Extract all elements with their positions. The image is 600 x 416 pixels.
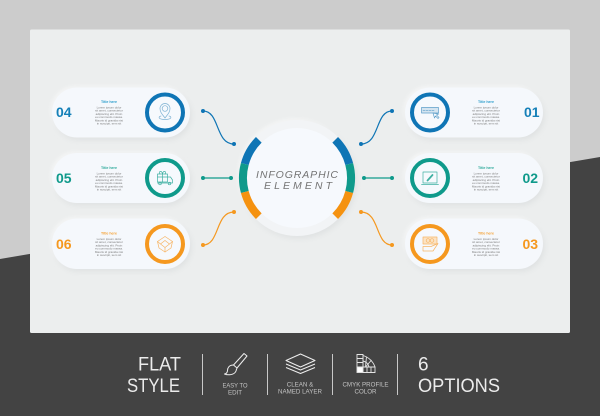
text block 05: sit amet, consectetur [95,175,123,179]
text block 06: in suscipit, sem sit [97,253,121,257]
center title: INFOGRAPHIC [256,169,338,181]
icon: laptop [422,172,438,184]
icon: cmyk swatch [357,354,375,372]
label: cmyk profile color: CMYK PROFILE [342,382,389,388]
icon ring 05 [147,160,183,196]
icon: brush [224,354,247,375]
icon: gem box [158,236,172,252]
label: easy to edit: EDIT [228,390,242,396]
text block 02: eu commodo massa. [472,181,500,185]
text block 04: adipiscing elit. Proin [96,112,123,116]
label: cmyk profile color [342,382,389,396]
text block 01: Title here [478,100,494,104]
number 05: 05 [56,170,72,186]
text block 06: Mauris id gravida nisi [95,250,123,254]
connector 01 [360,110,394,146]
label: clean and named layer: NAMED LAYER [278,388,322,396]
icon ring 02 [412,160,448,196]
text block 04: sit amet, consectetur [95,109,123,113]
text block 03: sit amet, consectetur [472,240,500,244]
footer: flat style [127,354,181,397]
text block 06: Lorem ipsum dolor [97,237,121,241]
text block 05: Title here [101,166,117,170]
text block 02: adipiscing elit. Proin [473,178,500,182]
text block 04 [95,100,123,126]
icon ring 06 [147,226,183,262]
text block 06: sit amet, consectetur [95,240,123,244]
number 06: 06 [56,236,72,252]
footer: 6 options: OPTIONS [418,376,500,397]
number 02: 02 [522,170,538,186]
text block 01: in suscipit, sem sit [474,122,498,126]
text block 04: in suscipit, sem sit [97,122,121,126]
panel: option 04 [52,88,190,138]
central circle [239,120,355,236]
text block 01: adipiscing elit. Proin [473,112,500,116]
panel: option 06 [52,218,190,269]
text block 05 [95,166,123,192]
text block 06: eu commodo massa. [95,247,123,251]
number 03: 03 [522,236,538,252]
label: easy to edit [222,382,248,396]
label: clean and named layer: CLEAN & [287,382,314,388]
icon: map pin [159,104,171,120]
panel: option 01 [405,88,543,138]
text block 04: Title here [101,100,117,104]
connector 04 [202,110,236,146]
connector 03 [360,210,394,246]
text block 02: sit amet, consectetur [472,175,500,179]
main panel [30,30,570,333]
text block 02 [472,166,500,192]
text block 05: Lorem ipsum dolor [97,172,121,176]
label: easy to edit: EASY TO [222,382,248,390]
text block 05: eu commodo massa. [95,181,123,185]
text block 02: Lorem ipsum dolor [474,172,498,176]
icon ring 03 [412,226,448,262]
text block 03: in suscipit, sem sit [474,253,498,257]
text block 06: adipiscing elit. Proin [96,243,123,247]
text block 06: Title here [101,232,117,236]
panel: option 03 [405,218,543,269]
icon: gift truck [158,171,172,185]
center title: ELEMENT [264,180,334,192]
text block 05: adipiscing elit. Proin [96,178,123,182]
text block 03: Lorem ipsum dolor [474,237,498,241]
number 01: 01 [524,104,540,120]
text block 04: eu commodo massa. [95,115,123,119]
panel: option 05 [52,153,190,203]
text block 04: Lorem ipsum dolor [97,106,121,110]
text block 02: in suscipit, sem sit [474,188,498,192]
icon ring 04 [147,94,183,130]
connector 06 [202,210,236,246]
text block 03: Title here [478,232,494,236]
label: cmyk profile color: COLOR [354,388,377,396]
connectors [202,110,394,246]
icon: search bar with cursor [422,108,439,118]
number 04: 04 [56,104,72,120]
ring segments [243,140,351,216]
text block 03: Mauris id gravida nisi [472,250,500,254]
text block 01: sit amet, consectetur [472,109,500,113]
text block 05: in suscipit, sem sit [97,188,121,192]
text block 01 [472,100,500,126]
footer: flat style: FLAT [138,354,181,376]
text block 01: Lorem ipsum dolor [474,106,498,110]
text block 05: Mauris id gravida nisi [95,184,123,188]
text block 06 [95,232,123,257]
label: clean and named layer [278,382,322,396]
icon: money in hand [423,237,438,251]
footer: 6 options [418,354,500,397]
text block 02: Title here [478,166,494,170]
connector 02 [362,176,394,180]
text block 01: Mauris id gravida nisi [472,118,500,122]
connector 05 [202,176,232,180]
footer: flat style: STYLE [127,376,180,397]
text block 01: eu commodo massa. [472,115,500,119]
panel: option 02 [405,153,543,203]
text block 04: Mauris id gravida nisi [95,118,123,122]
icon: layers [286,354,315,374]
center title [256,169,338,192]
icon ring 01 [412,94,448,130]
text block 03: eu commodo massa. [472,247,500,251]
text block 02: Mauris id gravida nisi [472,184,500,188]
footer: 6 options: 6 [418,354,429,376]
text block 03 [472,232,500,257]
text block 03: adipiscing elit. Proin [473,243,500,247]
